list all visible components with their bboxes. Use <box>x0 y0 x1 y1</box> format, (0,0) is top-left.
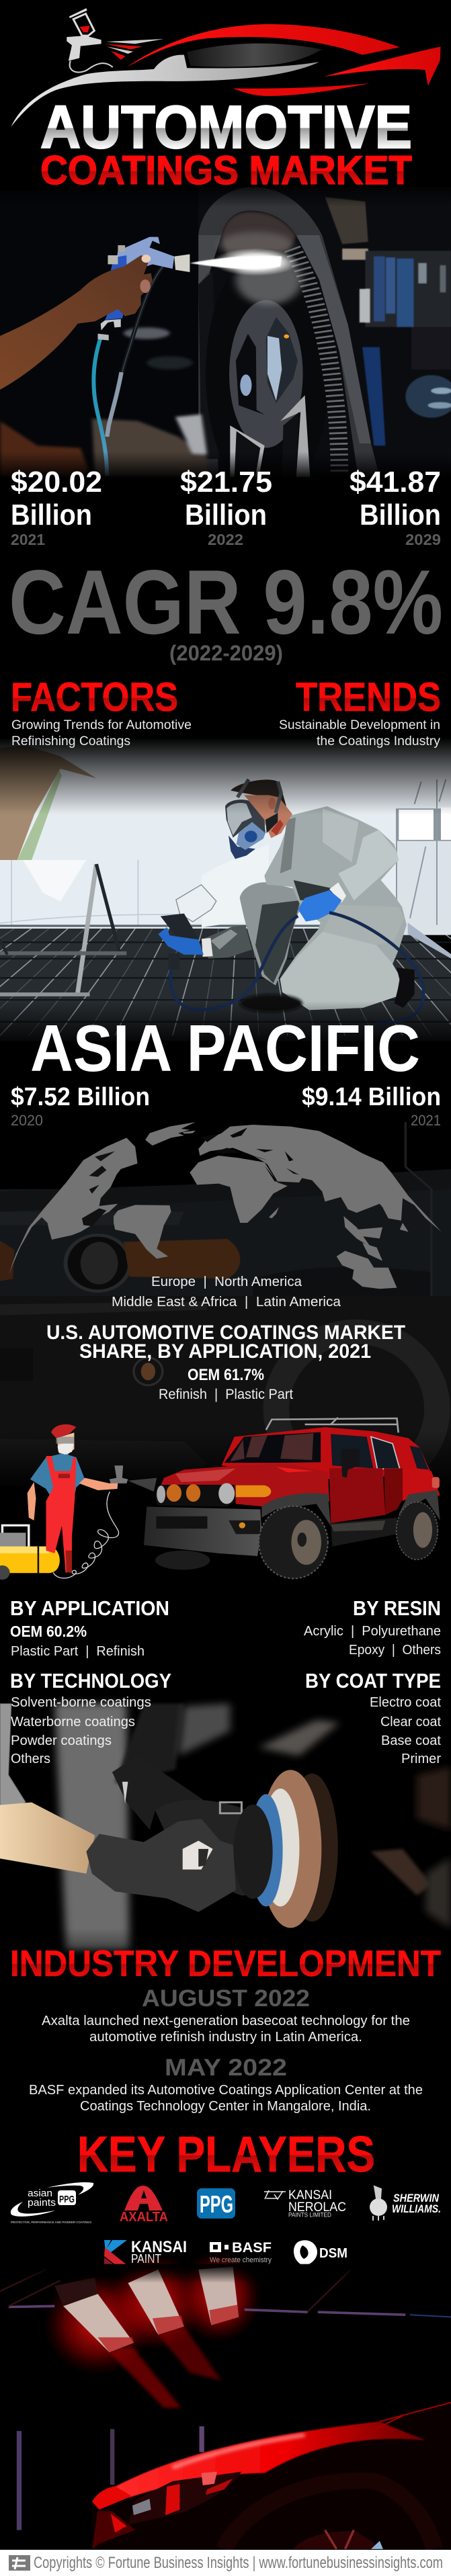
stand <box>78 864 96 993</box>
headlamp <box>128 2472 241 2525</box>
hose start <box>171 970 202 1010</box>
right side reflections <box>325 197 451 445</box>
lamp 3 <box>198 2267 239 2325</box>
value 2029: Billion <box>360 499 441 531</box>
wall folds <box>0 860 259 926</box>
Asia Pacific 2021 value <box>302 1083 441 1129</box>
grey hose <box>107 372 122 437</box>
May 2022 item: BASF expanded its Automotive Coatings Application Center at the <box>29 2083 423 2098</box>
by application: OEM 60.2% <box>10 1623 87 1640</box>
May 2022 item: Coatings Technology Center in Mangalore, India. <box>80 2099 371 2114</box>
madagascar <box>269 1207 279 1218</box>
title <box>40 94 412 193</box>
value 2021: 2021 <box>11 531 45 548</box>
tyre tread <box>292 249 339 472</box>
value 2022 <box>180 466 272 548</box>
logo: PPG <box>197 2188 235 2219</box>
booth floor <box>0 929 451 1041</box>
cup <box>176 885 216 922</box>
by resin: Acrylic | Polyurethane <box>304 1624 441 1639</box>
value 2022: $21.75 <box>180 466 272 499</box>
blue hose <box>93 339 107 476</box>
logo: DSM: DSM <box>319 2246 347 2261</box>
by coat type: Clear coat <box>380 1715 441 1729</box>
key players heading: KEY PLAYERS <box>77 2126 375 2182</box>
grey sweep <box>11 55 319 127</box>
logo: car silhouette with spray gun <box>11 8 441 127</box>
August 2022 item <box>42 1985 410 2045</box>
factors text: Refinishing Coatings <box>11 734 130 748</box>
by resin: BY RESIN <box>353 1596 441 1620</box>
tyre <box>206 249 329 499</box>
side windows <box>331 1434 373 1468</box>
by coat type: Electro coat <box>370 1695 441 1710</box>
roof rack <box>266 1418 399 1432</box>
illustration: painter and red SUV <box>0 1418 440 1580</box>
iceland <box>183 1131 196 1133</box>
north america <box>9 1137 138 1275</box>
world map <box>9 1122 442 1289</box>
hood <box>161 1463 329 1506</box>
africa <box>190 1156 288 1223</box>
door panels <box>329 1468 385 1523</box>
cabin <box>221 1427 432 1479</box>
logo: Kansai Paint: KANSAI <box>131 2238 187 2256</box>
fender glow <box>115 2421 425 2497</box>
by technology: Others <box>11 1752 50 1766</box>
factors heading: FACTORS <box>11 675 178 720</box>
by coat type <box>305 1669 441 1766</box>
tool body <box>112 1756 207 1830</box>
Asia Pacific heading: ASIA PACIFIC <box>30 1011 420 1085</box>
value 2022: Billion <box>185 499 267 531</box>
hose <box>53 1492 119 1578</box>
value 2029: $41.87 <box>350 466 441 499</box>
OEM share: OEM 61.7% <box>188 1366 264 1384</box>
spray cone <box>128 1478 157 1492</box>
spray glow <box>236 255 302 304</box>
arm and hand <box>0 255 153 390</box>
title line 2: COATINGS MARKET <box>40 148 412 193</box>
hudson and lakes <box>82 1151 115 1226</box>
paint gun <box>110 1465 128 1484</box>
by technology <box>10 1669 171 1766</box>
value 2029 <box>350 466 441 548</box>
lamp 2 <box>128 2270 184 2335</box>
logo: BASF: BASF <box>232 2240 272 2256</box>
fender arch <box>198 187 380 477</box>
value 2022: 2022 <box>208 531 243 548</box>
photo: painter in booth <box>0 738 451 1048</box>
title line 1: AUTOMOTIVE <box>40 94 412 161</box>
booth wall <box>0 739 451 934</box>
US market heading <box>46 1322 405 1363</box>
by resin <box>304 1596 441 1658</box>
Asia Pacific 2020 value: $7.52 Billion <box>11 1083 150 1111</box>
sill <box>233 83 370 96</box>
sill <box>331 1518 397 1547</box>
factors text <box>11 718 192 748</box>
window <box>187 44 322 67</box>
black hose <box>122 260 169 372</box>
right window and film <box>397 808 451 847</box>
hose <box>202 912 423 1023</box>
sleeve <box>0 1704 26 1812</box>
by technology: Powder coatings <box>11 1733 112 1748</box>
US market heading: SHARE, BY APPLICATION, 2021 <box>79 1340 371 1363</box>
photo: polishing machine <box>0 1704 451 1950</box>
hair <box>231 779 286 806</box>
background blur <box>0 327 207 477</box>
car body <box>198 187 451 477</box>
roof swoosh <box>126 24 400 67</box>
blurred background <box>54 1704 451 1950</box>
by technology: Waterborne coatings <box>11 1715 135 1729</box>
spray gun <box>69 8 87 18</box>
spray gun <box>161 914 198 939</box>
glove <box>298 890 341 922</box>
south america <box>114 1205 171 1258</box>
torso <box>264 806 407 1010</box>
May 2022 item: MAY 2022 <box>165 2055 287 2081</box>
logo: Axalta <box>120 2186 168 2225</box>
Asia Pacific 2021 value: $9.14 Billion <box>302 1083 441 1111</box>
Asia Pacific 2020 value <box>11 1083 150 1129</box>
background: dark vehicle front, upper <box>0 1122 451 1297</box>
logo: PPG: PPG <box>200 2190 233 2218</box>
rim <box>229 300 310 477</box>
mirror <box>341 1449 360 1478</box>
top fade <box>0 738 451 815</box>
logo: Asian Paints PPG: PROTECTIVE, PERFORMANCE AND POWDER COATINGS <box>11 2221 91 2224</box>
compressor <box>0 1525 60 1580</box>
CAGR period: (2022-2029) <box>169 641 283 665</box>
left glove <box>158 927 204 955</box>
logo: Asian Paints PPG: PPG <box>59 2194 75 2205</box>
thigh <box>240 882 318 986</box>
forearm <box>0 1802 95 1874</box>
lamp glows <box>43 2272 153 2375</box>
logo: Kansai Nerolac: PAINTS LIMITED <box>288 2212 331 2219</box>
regions list: Europe | North America <box>151 1275 302 1289</box>
bottom fade <box>0 1001 451 1048</box>
value 2021: $20.02 <box>11 466 102 499</box>
light beams <box>110 2347 181 2408</box>
far tyre <box>155 1551 210 1570</box>
by resin: Epoxy | Others <box>349 1643 441 1658</box>
copyright bar <box>0 2550 451 2576</box>
by technology: BY TECHNOLOGY <box>10 1669 171 1692</box>
August 2022 item: Axalta launched next-generation basecoat technology for the <box>42 2014 410 2028</box>
by application <box>10 1596 169 1659</box>
rear panel <box>323 46 441 85</box>
by coat type: Base coat <box>381 1733 441 1748</box>
logo: Sherwin Williams: SHERWIN <box>393 2192 440 2204</box>
car shadow body <box>92 2403 451 2549</box>
logo: Sherwin Williams <box>370 2186 441 2221</box>
by coat type: Primer <box>401 1752 441 1766</box>
islands <box>343 1216 409 1261</box>
trends text <box>279 718 441 748</box>
logo: BASF: We create chemistry <box>210 2256 272 2264</box>
by application: Plastic Part | Refinish <box>11 1644 145 1659</box>
photo: red car in paint booth <box>0 2250 451 2549</box>
wheel arch <box>224 2481 434 2549</box>
inland seas <box>202 1127 299 1181</box>
Asia Pacific 2021 value: 2021 <box>411 1112 441 1129</box>
arch interior <box>221 212 296 255</box>
masked panel <box>0 745 96 860</box>
indicator <box>236 1486 271 1497</box>
logo: Kansai Nerolac: NEROLAC <box>288 2200 346 2215</box>
painter <box>28 1424 118 1572</box>
August 2022 item: AUGUST 2022 <box>142 1985 310 2012</box>
bent leg <box>280 932 400 1010</box>
logo: BASF <box>210 2240 272 2264</box>
trends text: Sustainable Development in <box>279 718 440 732</box>
tail lamp <box>432 1477 440 1488</box>
windscreen <box>224 1432 321 1463</box>
front tyre <box>259 1506 328 1578</box>
neck and face <box>244 795 292 838</box>
front face <box>155 1485 236 1506</box>
logo: Sherwin Williams: WILLIAMS. <box>392 2202 441 2215</box>
rear tyre <box>397 1502 438 1559</box>
SUV <box>144 1418 440 1578</box>
logo: Kansai Nerolac: KANSAI <box>288 2188 332 2202</box>
rails <box>9 2306 405 2315</box>
nose <box>92 2486 132 2509</box>
sleeve <box>338 830 399 900</box>
logo: Asian Paints PPG: paints <box>28 2197 56 2208</box>
regions list: Middle East & Africa | Latin America <box>112 1295 341 1310</box>
logo: DSM <box>294 2240 347 2266</box>
logo: Asian Paints PPG <box>11 2182 93 2224</box>
market values <box>11 466 441 548</box>
gloved hand <box>86 1819 236 1912</box>
logo: Kansai Paint <box>104 2238 187 2266</box>
lamp 1 <box>54 2278 134 2352</box>
bumper <box>144 1506 261 1556</box>
by technology: Solvent-borne coatings <box>11 1695 151 1710</box>
wheel arch front <box>261 1493 331 1526</box>
photo: spray gun on car wheel <box>0 187 451 499</box>
greenland <box>145 1122 196 1146</box>
value 2021: Billion <box>11 499 92 531</box>
australia <box>337 1251 397 1289</box>
vertical lights <box>17 2431 22 2530</box>
icon: Fortune Business Insights <box>9 2555 30 2571</box>
application list: Refinish | Plastic Part <box>159 1387 293 1402</box>
value 2021 <box>11 466 102 548</box>
gun <box>97 237 190 341</box>
top fade over lamps <box>0 2264 451 2283</box>
eurasia <box>198 1125 442 1232</box>
pad <box>286 1774 338 1922</box>
May 2022 item <box>29 2055 423 2114</box>
August 2022 item: automotive refinish industry in Latin America. <box>89 2030 362 2045</box>
logo: Asian Paints PPG: asian <box>28 2188 52 2199</box>
US market heading: U.S. AUTOMOTIVE COATINGS MARKET <box>46 1322 405 1344</box>
logo: Kansai Nerolac <box>264 2188 346 2219</box>
trends text: the Coatings Industry <box>317 734 441 748</box>
mask <box>225 779 281 859</box>
value 2029: 2029 <box>405 531 441 548</box>
left shin <box>202 925 252 959</box>
logo: Kansai Paint: PAINT <box>131 2252 161 2266</box>
shoe <box>395 968 415 1008</box>
factors text: Growing Trends for Automotive <box>11 718 192 732</box>
by application: BY APPLICATION <box>10 1596 169 1620</box>
logo: Axalta: AXALTA <box>120 2210 168 2225</box>
Asia Pacific 2020 value: 2020 <box>11 1112 43 1129</box>
wheel arch rear <box>399 1490 440 1520</box>
regions list <box>112 1275 341 1310</box>
background: dark vehicle front, lower <box>0 1296 451 1486</box>
